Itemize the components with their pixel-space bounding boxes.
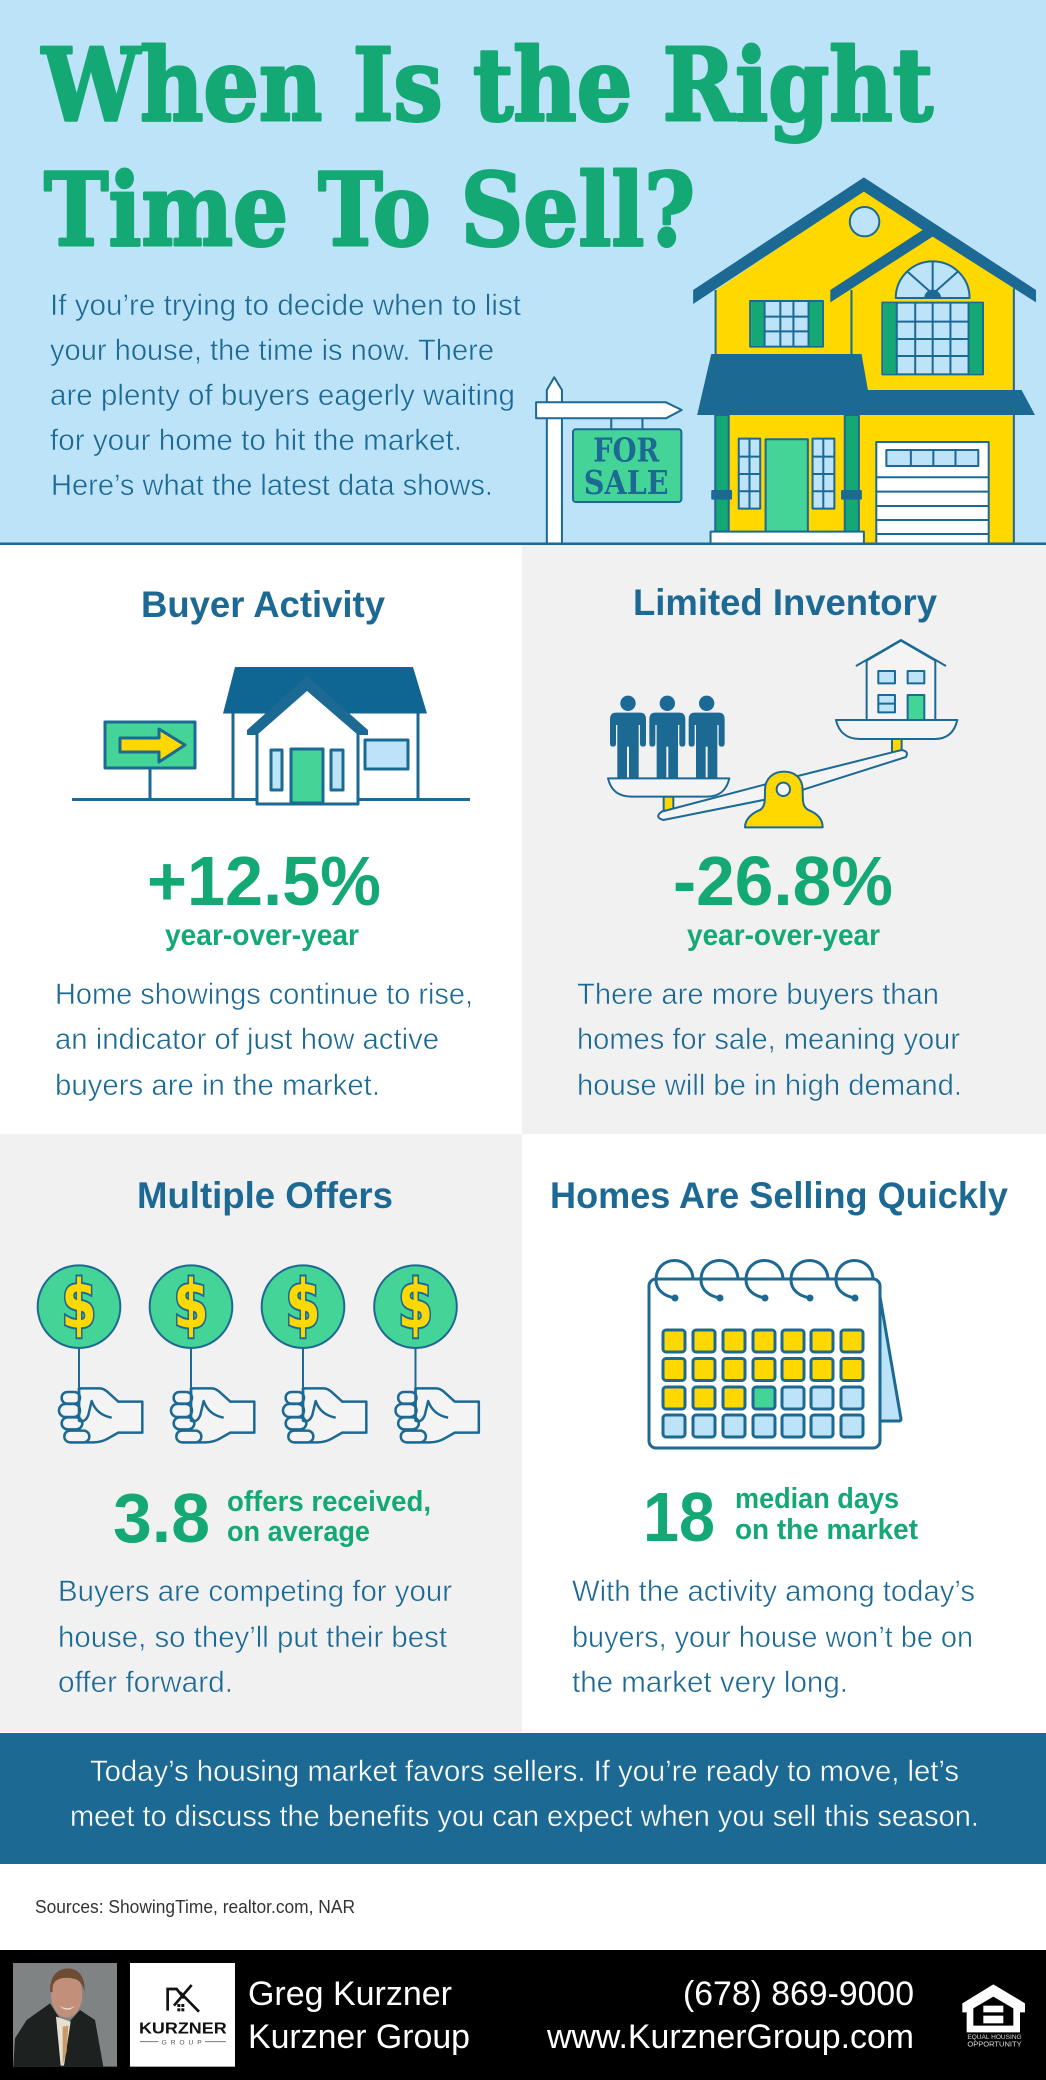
icon: hand and dollar 4: [374, 1265, 479, 1442]
contact details: (678) 869-9000: [683, 1975, 914, 2013]
title: When Is the Right: [41, 26, 933, 144]
text block: homes for sale, meaning your: [577, 1023, 960, 1056]
panel: buyer activity: [0, 545, 522, 1134]
icon: hand and dollar 4: $: [398, 1265, 433, 1343]
stat caption: on the market: [735, 1514, 918, 1546]
icon: equal housing opportunity: OPPORTUNITY: [967, 2041, 1022, 2048]
stat: 18: [643, 1478, 715, 1556]
heading: Homes Are Selling Quickly: [550, 1175, 1008, 1216]
intro text: are plenty of buyers eagerly waiting: [50, 379, 515, 412]
intro text: [50, 289, 522, 502]
icon: for sale sign: SALE: [584, 463, 669, 502]
agent name: Greg Kurzner: [248, 1975, 452, 2013]
panel: homes are selling quickly: [522, 1134, 1046, 1732]
title: Time To Sell?: [44, 151, 695, 269]
heading: Limited Inventory: [633, 582, 937, 623]
heading: Multiple Offers: [137, 1175, 393, 1216]
text block: With the activity among today’s: [572, 1575, 975, 1608]
stat: 3.8: [113, 1479, 210, 1557]
icon: hands holding dollar signs: [38, 1265, 479, 1442]
stat caption: median days: [735, 1483, 899, 1515]
intro text: Here’s what the latest data shows.: [51, 469, 493, 502]
company logo: KURZNER: [139, 2020, 227, 2037]
intro text: If you’re trying to decide when to list: [50, 289, 522, 322]
text block: an indicator of just how active: [55, 1023, 439, 1056]
intro text: your house, the time is now. There: [50, 334, 494, 367]
stat caption: on average: [227, 1516, 370, 1548]
text block: house, so they’ll put their best: [58, 1621, 448, 1654]
call to action band: [0, 1733, 1046, 1864]
company logo: GROUP: [162, 2039, 202, 2046]
intro text: for your home to hit the market.: [50, 424, 462, 457]
heading: Buyer Activity: [141, 584, 385, 625]
contact details: www.KurznerGroup.com: [546, 2018, 914, 2056]
icon: hand and dollar 1: $: [61, 1265, 96, 1343]
stat caption: year-over-year: [687, 919, 880, 952]
stat caption: [735, 1483, 918, 1546]
text block: the market very long.: [572, 1666, 848, 1699]
text block: [58, 1575, 452, 1699]
icon: hand and dollar 1: [38, 1265, 142, 1442]
call to action band: Today’s housing market favors sellers. If you’re ready to move, let’s: [90, 1755, 959, 1788]
company logo: [130, 1963, 235, 2067]
icon: hand and dollar 2: $: [173, 1265, 208, 1343]
stat: -26.8%: [673, 842, 893, 920]
stat: +12.5%: [147, 842, 381, 920]
stat caption: year-over-year: [165, 919, 359, 952]
icon: seesaw with people and house: [608, 640, 957, 827]
panel: header: [0, 0, 1046, 546]
call to action band: meet to discuss the benefits you can expect when you sell this season.: [70, 1800, 979, 1833]
icon: hand and dollar 3: $: [285, 1265, 320, 1343]
icon: equal housing opportunity: [962, 1984, 1025, 2048]
stat caption: [227, 1486, 431, 1548]
text block: Home showings continue to rise,: [55, 978, 473, 1011]
text block: house will be in high demand.: [577, 1069, 962, 1102]
sources: Sources: ShowingTime, realtor.com, NAR: [35, 1897, 355, 1917]
icon: house with arrow sign: [72, 667, 470, 804]
icon: for sale sign: FOR: [593, 431, 660, 470]
agent name: Kurzner Group: [248, 2018, 470, 2056]
title: [41, 26, 933, 269]
text block: [55, 978, 473, 1102]
panel: multiple offers: [0, 1134, 522, 1732]
text block: Buyers are competing for your: [58, 1575, 452, 1608]
icon: calendar: [649, 1260, 901, 1448]
icon: for sale sign: [536, 377, 682, 544]
text block: [577, 978, 962, 1102]
text block: [572, 1575, 975, 1699]
panel: limited inventory: [522, 545, 1046, 1134]
icon: hand and dollar 3: [262, 1265, 366, 1442]
contact details: [546, 1975, 914, 2056]
text block: offer forward.: [58, 1666, 233, 1699]
icon: hand and dollar 2: [150, 1265, 254, 1442]
icon: house: [693, 177, 1036, 544]
stat caption: offers received,: [227, 1486, 431, 1518]
text block: There are more buyers than: [577, 978, 939, 1011]
footer: [0, 1950, 1046, 2080]
agent name: [248, 1975, 470, 2056]
text block: buyers, your house won’t be on: [572, 1621, 973, 1654]
icon: equal housing opportunity: EQUAL HOUSING: [967, 2034, 1022, 2041]
agent photo: [13, 1963, 117, 2067]
text block: buyers are in the market.: [55, 1069, 380, 1102]
